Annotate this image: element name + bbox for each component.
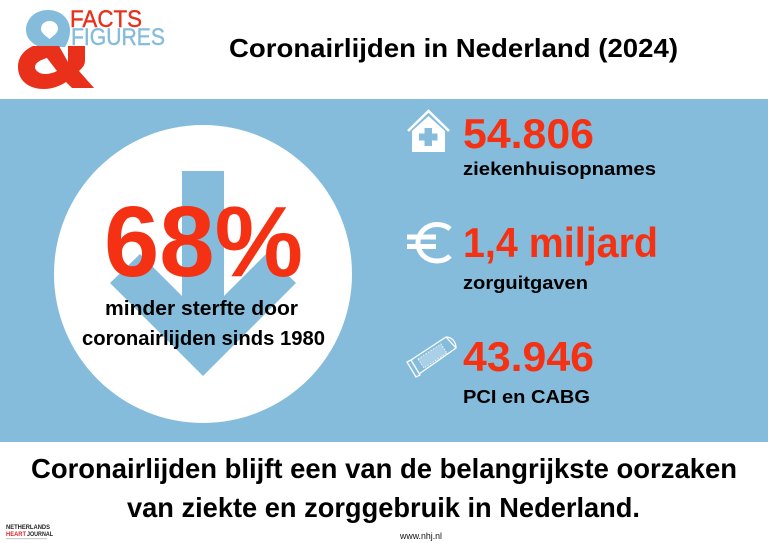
logo: Netherlands Heart Journal: NETHERLANDS (6, 524, 51, 531)
website url: www.nhj.nl (399, 531, 442, 542)
icon: hospital house (408, 111, 449, 152)
panel: mortality circle (54, 125, 352, 423)
caption: minder sterfte door: minder sterfte door (105, 298, 298, 320)
stat: hospital admissions (408, 110, 656, 179)
conclusion line 2: van ziekte en zorggebruik in Nederland. (127, 492, 640, 523)
icon: euro (407, 224, 450, 261)
stat: healthcare spending (407, 219, 658, 293)
number: 54.806: 54.806 (463, 110, 594, 157)
label: PCI en CABG: PCI en CABG (463, 387, 590, 407)
logo: Netherlands Heart Journal (6, 524, 53, 539)
conclusion line 1: Coronairlijden blijft een van de belangrijkste oorzaken (31, 453, 737, 484)
number: 1,4 miljard: 1,4 miljard (463, 219, 658, 266)
logo: Netherlands Heart Journal: HEART (6, 531, 26, 538)
label: ziekenhuisopnames: ziekenhuisopnames (463, 159, 656, 179)
panel: blue band (0, 99, 768, 442)
icon: stent (407, 337, 456, 377)
logo: Facts & Figures (18, 6, 165, 89)
logo: Facts & Figures: FACTS (70, 6, 142, 33)
logo: Facts & Figures: FIGURES (71, 24, 165, 51)
big number: 68%: 68% (104, 186, 303, 298)
stat: PCI and CABG (407, 333, 594, 407)
logo: Netherlands Heart Journal: JOURNAL (27, 531, 53, 538)
icon: down arrow (110, 171, 296, 376)
title: Coronairlijden in Nederland (2024) (229, 33, 678, 63)
number: 43.946: 43.946 (463, 333, 594, 380)
caption: coronairlijden sinds 1980: coronairlijden sinds 1980 (82, 328, 325, 350)
label: zorguitgaven: zorguitgaven (463, 273, 588, 293)
